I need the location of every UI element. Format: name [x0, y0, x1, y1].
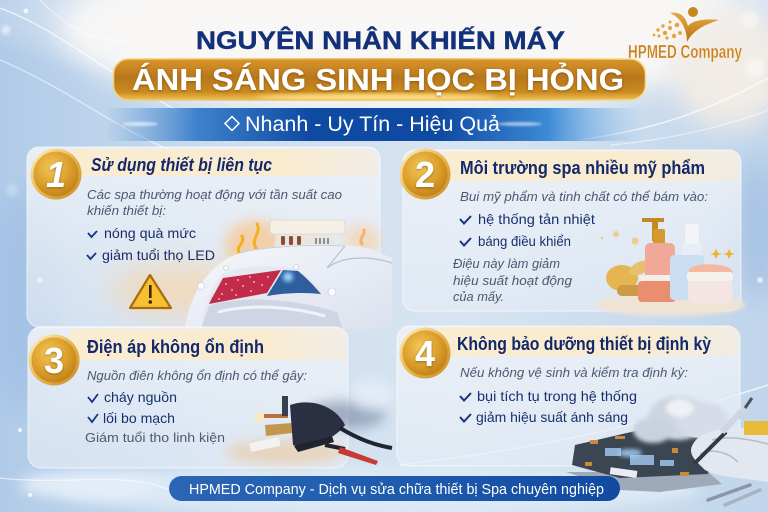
panel 4 checklist: giảm hiệu suất ánh sáng — [476, 409, 628, 425]
panel 2 checklist: báng điều khiển — [478, 233, 571, 249]
panel 1 intro: Các spa thường hoạt động với tần suất cao — [87, 188, 342, 202]
footer pill: HPMED Company - Dịch vụ sửa chữa thiết bị Spa chuyên nghiệp — [189, 481, 604, 498]
cosmetic products — [595, 218, 745, 316]
gloved hand with tool — [691, 398, 768, 482]
panel 1 heading: Sử dụng thiết bị liên tục — [91, 155, 272, 175]
panel 3 checklist — [88, 389, 177, 426]
gold title banner — [114, 59, 646, 100]
badge 2 — [400, 148, 450, 200]
panel 4 checklist: bụi tích tụ trong hệ thống — [477, 388, 637, 404]
badge 4: 4 — [415, 333, 435, 374]
logo: HPMED Company — [628, 7, 742, 62]
title line 1: NGUYÊN NHÂN KHIẾN MÁY — [196, 25, 565, 55]
panel 2 heading: Môi trường spa nhiều mỹ phẩm — [460, 158, 705, 178]
panel 2 note: Điệu này làm giảm — [453, 257, 560, 271]
badge 4 — [400, 328, 450, 378]
light therapy device — [185, 220, 392, 329]
badge 3: 3 — [44, 340, 64, 381]
panel 4: no maintenance — [397, 326, 740, 466]
burnt plug with smoke — [249, 379, 394, 465]
badge 1 — [30, 148, 82, 200]
badge 1: 1 — [46, 154, 66, 195]
footer pill — [169, 476, 620, 501]
panel 3 note: Giám tuổi tho linh kiện — [85, 430, 225, 445]
panel 2 checklist — [460, 211, 595, 249]
panel 3 heading: Điện áp không ổn định — [87, 337, 264, 357]
icon: flames — [238, 224, 364, 254]
panel 1 checklist: nóng quà mức — [104, 225, 196, 241]
panel 2: cosmetics environment — [400, 148, 745, 316]
panel 1 intro: khiến thiết bị: — [87, 204, 166, 218]
dust cloud — [633, 396, 731, 443]
panel 3 checklist: cháy nguồn — [104, 389, 177, 405]
panel 2 note: hiệu suất hoạt động — [453, 274, 572, 288]
slogan text: Nhanh - Uy Tín - Hiệu Quả — [245, 113, 500, 136]
title line 2: ÁNH SÁNG SINH HỌC BỊ HỎNG — [132, 61, 624, 97]
badge 2: 2 — [415, 154, 435, 195]
panel 3 intro: Nguồn điên không ổn định có thể gây: — [87, 369, 307, 383]
panel 3 checklist: lối bo mạch — [103, 410, 175, 426]
pens — [708, 485, 760, 505]
blue ribbon: slogan — [105, 108, 645, 141]
panel 1 checklist — [87, 225, 215, 263]
badge 3 — [28, 334, 80, 386]
panel 4 heading: Không bảo dưỡng thiết bị định kỳ — [457, 334, 711, 354]
circuit board repair scene — [566, 396, 768, 505]
panel 2 note: của mấy. — [453, 290, 504, 304]
slogan diamond icon — [225, 116, 239, 130]
panel 1 checklist: giảm tuổi thọ LED — [102, 247, 215, 263]
panel 4 intro: Nếu không vệ sinh và kiểm tra định kỳ: — [460, 366, 688, 380]
panel 3: unstable voltage — [28, 327, 348, 468]
panel 1: continuous use — [27, 147, 380, 327]
panel 2 checklist: hệ thống tản nhiệt — [478, 211, 595, 227]
icon: warning triangle — [130, 275, 171, 308]
panel 4 checklist — [460, 388, 637, 425]
panel 2 intro: Bui mỹ phẩm và tinh chất có thể bám vào: — [460, 190, 708, 204]
